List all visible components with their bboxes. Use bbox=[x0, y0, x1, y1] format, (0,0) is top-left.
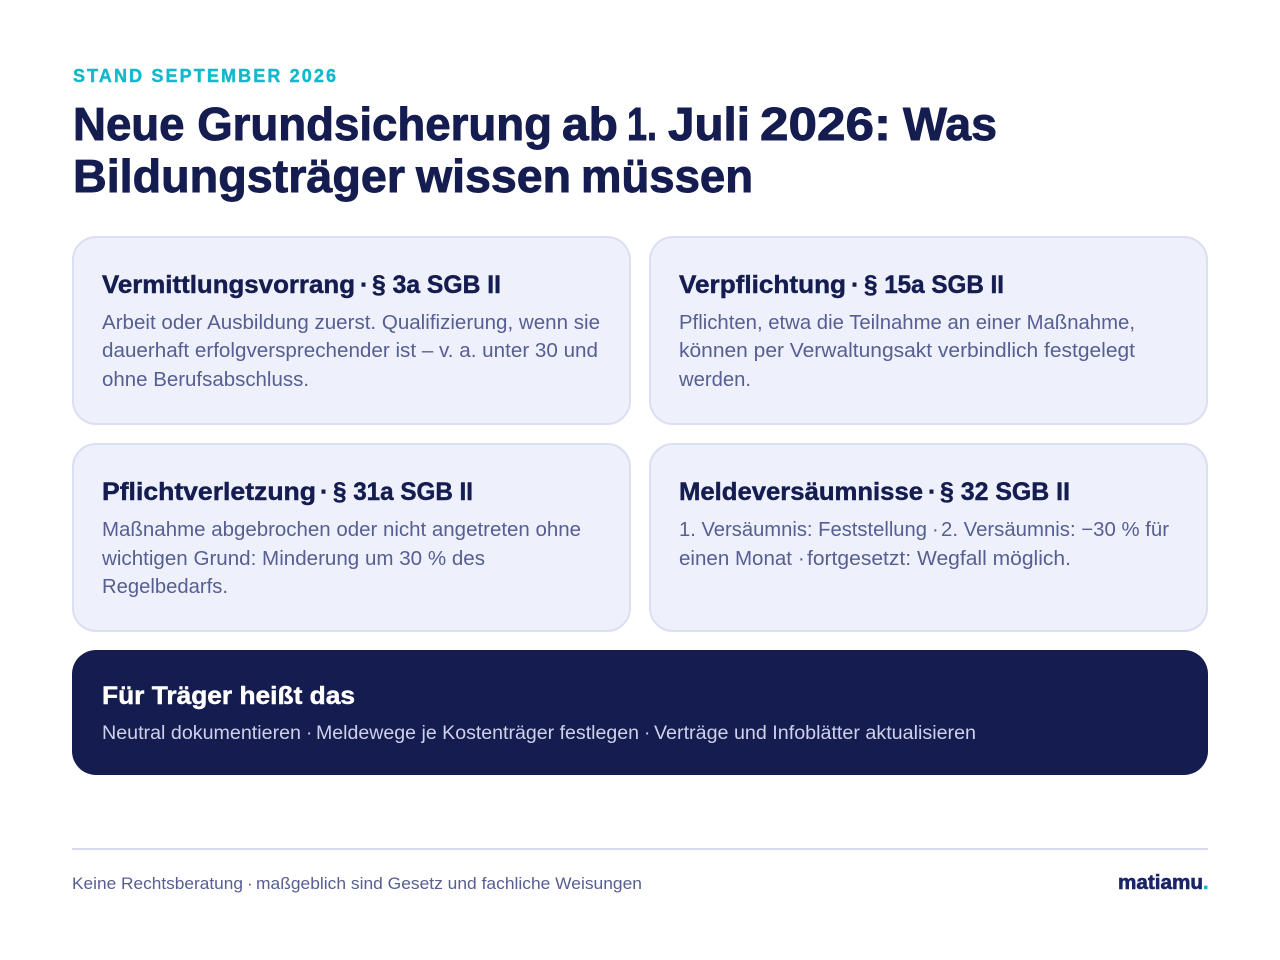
card text: Maßnahme abgebrochen oder nicht angetreten ohne bbox=[102, 519, 581, 541]
title: Neue Grundsicherung bbox=[73, 98, 552, 150]
title: Juli bbox=[668, 98, 750, 150]
logo: matiamu: matiamu bbox=[1118, 872, 1203, 894]
card heading bbox=[102, 271, 501, 299]
title: 1. bbox=[627, 98, 657, 150]
card heading: Verpflichtung bbox=[679, 271, 846, 299]
title: Was bbox=[903, 98, 997, 150]
callout text: Verträge und Infoblätter aktualisieren bbox=[654, 723, 976, 744]
card heading: · bbox=[851, 271, 859, 299]
footer note: maßgeblich sind Gesetz und fachliche Weisungen bbox=[256, 874, 642, 893]
card heading: Vermittlungsvorrang bbox=[102, 271, 355, 299]
card text: 1. Versäumnis: Feststellung bbox=[679, 519, 927, 541]
footer note: Keine Rechtsberatung bbox=[72, 874, 243, 893]
eyebrow: date: STAND SEPTEMBER 2026 bbox=[73, 66, 336, 86]
card heading: § 3a SGB II bbox=[372, 271, 501, 299]
card text: · bbox=[798, 548, 805, 570]
card text: 2. Versäumnis: −30 % für bbox=[941, 519, 1169, 541]
callout text: · bbox=[644, 723, 650, 744]
card heading: § 31a SGB II bbox=[333, 478, 473, 506]
title: ab bbox=[562, 98, 618, 150]
card text: können per Verwaltungsakt verbindlich festgelegt bbox=[679, 340, 1135, 362]
callout text: · bbox=[306, 723, 312, 744]
footer note bbox=[72, 874, 642, 893]
card text: Pflichten, etwa die Teilnahme an einer Maßnahme, bbox=[679, 312, 1135, 334]
card heading bbox=[679, 478, 1070, 506]
card heading: § 32 SGB II bbox=[940, 478, 1070, 506]
card text: wichtigen Grund: Minderung um 30 % des bbox=[101, 548, 485, 570]
logo: matiamu: . bbox=[1203, 872, 1209, 894]
card heading: Meldeversäumnisse bbox=[679, 478, 923, 506]
title: 2026: bbox=[760, 98, 891, 150]
card text bbox=[679, 519, 1169, 570]
card text: Arbeit oder Ausbildung zuerst. Qualifizierung, wenn sie bbox=[102, 312, 600, 334]
title: müssen bbox=[581, 150, 753, 202]
panel: Pflichtverletzung bbox=[73, 444, 630, 631]
title: wissen bbox=[415, 150, 571, 202]
card text: · bbox=[932, 519, 939, 541]
panel: Verpflichtung bbox=[650, 237, 1207, 424]
callout text bbox=[102, 723, 976, 744]
card heading bbox=[102, 478, 473, 506]
footer note: · bbox=[247, 874, 253, 893]
card text: fortgesetzt: Wegfall möglich. bbox=[807, 548, 1071, 570]
title bbox=[73, 98, 997, 202]
card heading: Pflichtverletzung bbox=[102, 478, 316, 506]
card heading bbox=[679, 271, 1004, 299]
card text bbox=[102, 312, 600, 391]
callout text: Meldewege je Kostenträger festlegen bbox=[316, 723, 639, 744]
card text bbox=[678, 312, 1135, 391]
callout text: Neutral dokumentieren bbox=[102, 723, 301, 744]
card heading: · bbox=[320, 478, 328, 506]
panel: Für Träger heißt das bbox=[72, 650, 1208, 775]
card text: ohne Berufsabschluss. bbox=[102, 369, 309, 391]
card text: einen Monat bbox=[679, 548, 792, 570]
title: Bildungsträger bbox=[73, 150, 405, 202]
card text: dauerhaft erfolgversprechender ist – v. a. unter 30 und bbox=[102, 340, 598, 362]
card heading: · bbox=[360, 271, 368, 299]
card heading: · bbox=[928, 478, 936, 506]
card text: Regelbedarfs. bbox=[102, 576, 228, 598]
panel: Vermittlungsvorrang bbox=[73, 237, 630, 424]
panel: Meldeversäumnisse bbox=[650, 444, 1207, 631]
callout heading: Für Träger heißt das bbox=[102, 682, 355, 710]
card heading: § 15a SGB II bbox=[864, 271, 1004, 299]
card text bbox=[101, 519, 581, 598]
card text: werden. bbox=[678, 369, 751, 391]
